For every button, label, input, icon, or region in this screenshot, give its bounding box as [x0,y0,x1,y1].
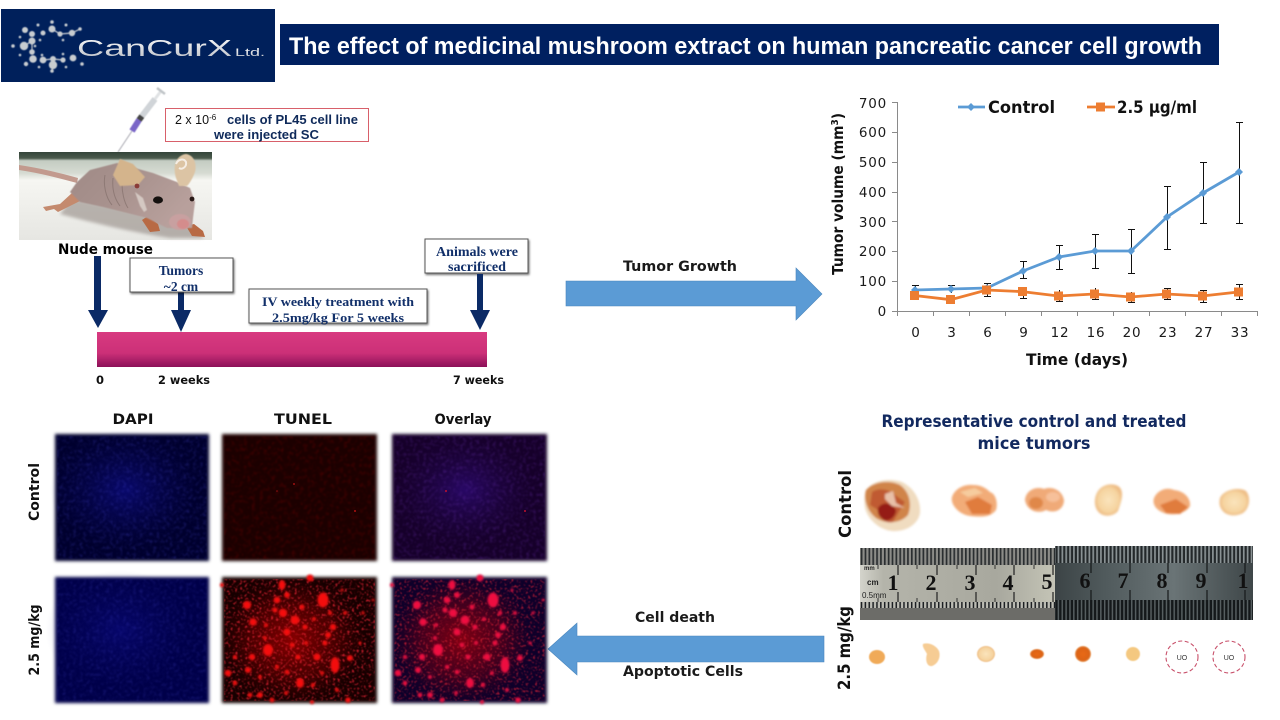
micrograph: overlay treated [390,574,547,704]
arrow: start [88,256,108,328]
ruler: light half [860,548,1055,620]
y tick labels: 200 [859,244,887,260]
axis titles [829,113,1128,369]
arrow: 7 weeks [470,274,490,330]
box: IV treatment: IV weekly treatment with [262,294,415,309]
arrow: tumor growth: Tumor Growth [623,259,737,275]
ruler numbers: 1 [888,570,898,595]
y tick labels: 100 [859,274,887,290]
ruler numbers: 7 [1118,568,1128,593]
axis titles: Tumor volume (mm [829,107,847,275]
ruler numbers: 2 [926,570,936,595]
y tick labels: 600 [859,125,887,141]
ruler: cm [867,578,879,587]
box: animals sacrificed: sacrificed [448,259,507,274]
label: treated tumors: 2.5 mg/kg [835,606,855,690]
column headings: fluorescence: TUNEL [274,412,332,428]
series: 2.5 µg/ml [910,286,1243,304]
control tumors row [864,480,1249,531]
row labels: fluorescence: Control [27,463,43,521]
ruler numbers: 8 [1156,568,1168,593]
error bars: treated [984,283,1243,302]
y tick labels [859,96,887,320]
heading: representative tumors: mice tumors [978,434,1090,454]
arrow: 2 weeks [171,290,191,332]
arrow: cell death / apoptotic cells: Apoptotic Cells [623,664,743,680]
micrograph: TUNEL control [222,434,377,561]
box: tumors [130,258,233,294]
line chart: tumor volume [829,96,1258,369]
x tick labels: 3 [947,325,957,341]
x tick labels: 27 [1195,325,1213,341]
y tick labels: 700 [859,96,887,112]
x tick labels: 9 [1019,325,1029,341]
box: tumors: Tumors [159,263,203,278]
micrograph: DAPI treated [45,570,209,703]
ruler numbers: 6 [1080,568,1090,593]
arrow: tumor growth [566,259,822,320]
micrograph: DAPI control [50,430,209,561]
tumor 1 [864,480,920,531]
column headings: fluorescence: Overlay [434,412,492,428]
x tick labels [911,325,1249,341]
ruler numbers: 9 [1196,568,1206,593]
y tick labels: 500 [859,155,887,171]
label: nude mouse: Nude mouse [58,242,153,258]
legend: 2.5 µg/ml [1117,98,1197,118]
tumor 6 [1219,489,1249,515]
ruler: dark half [1055,546,1253,620]
timeline labels [96,373,504,387]
empty markers: UO [1166,641,1245,673]
tumor 3 [1025,488,1064,512]
tumor 4 [1095,484,1122,516]
timeline bar [97,332,487,367]
logo wordmark: Ltd. [235,47,265,59]
row labels: fluorescence [27,463,43,676]
micrograph: overlay control [392,432,547,561]
ruler: mm [864,566,875,572]
icon: molecular dots [11,20,84,73]
x tick labels: 16 [1087,325,1105,341]
legend [958,98,1197,118]
micrograph: TUNEL treated [220,574,377,704]
timeline labels: 2 weeks [158,373,210,387]
callout: cell injection: cells of PL45 cell line [227,113,358,127]
x tick labels: 12 [1051,325,1069,341]
axis titles: 3 [830,119,841,125]
callout: cell injection [166,108,368,142]
x tick labels: 33 [1231,325,1249,341]
chart axes [892,102,1258,316]
arrow: cell death / apoptotic cells: Cell death [635,610,715,626]
treated tumors row [869,641,1245,673]
y tick labels: 400 [859,185,887,201]
box: tumors: ~2 cm [164,279,199,294]
series: control [911,168,1243,294]
x tick labels: 0 [911,325,921,341]
title [280,24,1219,65]
logo wordmark: CanCurX [77,35,232,61]
callout: cell injection: 2 x 10 [175,113,209,127]
callout: cell injection: -6 [209,113,217,122]
box: IV treatment [249,289,427,325]
label: control tumors: Control [836,470,856,538]
box: animals sacrificed [425,239,528,274]
error bars: control [912,122,1243,293]
ruler numbers: 1 [1238,568,1248,593]
empty markers: UO: UO [1177,655,1188,662]
box: animals sacrificed: Animals were [436,244,518,259]
arrow: cell death / apoptotic cells [548,610,824,680]
legend: Control [988,98,1055,118]
ruler numbers: 4 [1002,570,1014,595]
column headings: fluorescence: DAPI [112,412,154,428]
tumor 5 [1153,489,1190,514]
heading: representative tumors: Representative control and treated [882,412,1186,432]
row labels: fluorescence: 2.5 mg/kg [27,604,43,676]
empty markers: UO: UO [1224,655,1235,662]
photo: nude mouse [19,152,212,240]
ruler: 0.5mm [862,591,887,600]
heading: representative tumors [882,412,1186,454]
ruler numbers: 5 [1042,569,1052,594]
ruler [860,546,1253,620]
timeline labels: 7 weeks [453,373,504,387]
ruler numbers [888,568,1248,595]
title: The effect of medicinal mushroom extract on human pancreatic cancer cell growth [289,33,1202,60]
tumor 2 [952,485,997,517]
x tick labels: 6 [983,325,993,341]
icon: syringe [118,88,165,152]
box: IV treatment: 2.5mg/kg For 5 weeks [272,310,404,325]
axis titles: Time (days) [1026,350,1128,369]
column headings: fluorescence [112,412,492,428]
callout: cell injection: were injected SC [213,128,319,142]
y tick labels: 300 [859,215,887,231]
timeline labels: 0 [96,373,104,387]
logo: CanCurX Ltd. [1,9,275,82]
x tick labels: 23 [1159,325,1177,341]
ruler numbers: 3 [964,570,976,595]
axis titles: ) [829,113,847,119]
logo wordmark [77,35,265,61]
x tick labels: 20 [1123,325,1141,341]
y tick labels: 0 [878,304,887,320]
